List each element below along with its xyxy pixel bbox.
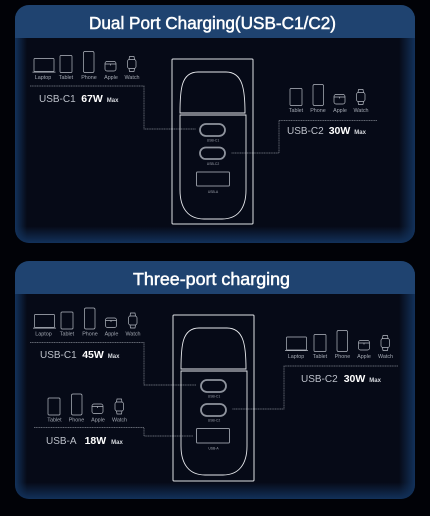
connector: USB-C1 — [30, 86, 196, 129]
label: USB-C2 30W: USB-C2 30W Max — [301, 373, 382, 385]
icons: USB-A devices: Phone — [69, 418, 84, 424]
charger: dual port — [172, 59, 253, 224]
icons: USB-C1 devices — [32, 52, 140, 81]
charger: dual port: USB-C2 — [207, 162, 219, 166]
label: USB-A 18W: USB-A 18W Max — [46, 435, 123, 447]
charger: three-port: USB-A — [208, 446, 219, 450]
icons: USB-C2 devices: Apple — [333, 108, 347, 114]
icons: USB-C2 devices: Phone — [310, 108, 326, 114]
icons: USB-C2 devices: Tablet — [313, 354, 328, 360]
label: USB-C2 30W: USB-C2 30W Max — [287, 125, 367, 137]
icons: USB-C1 devices: Apple — [104, 75, 118, 81]
icons: USB-A devices: Watch — [112, 418, 127, 424]
icons: USB-C1 devices: Apple — [105, 332, 118, 338]
icons: USB-C1 devices: Laptop — [35, 332, 52, 338]
header: dual port — [15, 5, 415, 38]
icons: USB-A devices: Tablet — [47, 418, 62, 424]
connector: USB-A — [34, 428, 193, 436]
header: three-port — [15, 261, 415, 294]
icons: USB-C1 devices: Laptop — [35, 75, 51, 81]
panel: dual port charging — [15, 5, 415, 243]
label: USB-C1 67W: USB-C1 67W Max — [39, 93, 119, 105]
title: dual port: Dual Port Charging(USB-C1/C2) — [89, 13, 336, 33]
charger: three-port — [173, 315, 254, 481]
icons: USB-C2 devices: Watch — [353, 108, 369, 114]
icons: USB-C2 devices: Tablet — [289, 108, 304, 114]
icons: USB-C2 devices — [285, 330, 393, 360]
icons: USB-C1 devices: Phone — [82, 332, 98, 338]
icons: USB-C2 devices: Apple — [357, 354, 371, 360]
icons: USB-C1 devices: Tablet — [60, 332, 75, 338]
icons: USB-C1 devices: Watch — [124, 75, 140, 81]
icons: USB-C2 devices: Watch — [378, 354, 393, 360]
icons: USB-C2 devices: Laptop — [288, 354, 304, 360]
icons: USB-A devices — [47, 394, 127, 424]
icons: USB-C2 devices: Phone — [335, 354, 350, 360]
label: USB-C1 45W: USB-C1 45W Max — [40, 349, 120, 361]
connector: USB-C2 — [231, 120, 377, 153]
charger: three-port: USB-C2 — [208, 418, 220, 422]
icons: USB-C1 devices: Watch — [125, 332, 141, 338]
connector: USB-C1 — [30, 342, 196, 385]
panel: three-port charging — [15, 261, 415, 499]
icons: USB-C2 devices — [289, 84, 369, 114]
connector: USB-C2 — [232, 366, 398, 409]
title: three-port: Three-port charging — [133, 269, 290, 289]
charger: three-port: USB-C1 — [208, 394, 220, 398]
charger: dual port: USB-A — [208, 190, 219, 194]
icons: USB-C1 devices: Phone — [81, 75, 97, 81]
icons: USB-C1 devices — [33, 308, 141, 338]
charger: dual port: USB-C1 — [207, 138, 219, 142]
icons: USB-C1 devices: Tablet — [59, 75, 74, 81]
icons: USB-A devices: Apple — [91, 418, 105, 424]
